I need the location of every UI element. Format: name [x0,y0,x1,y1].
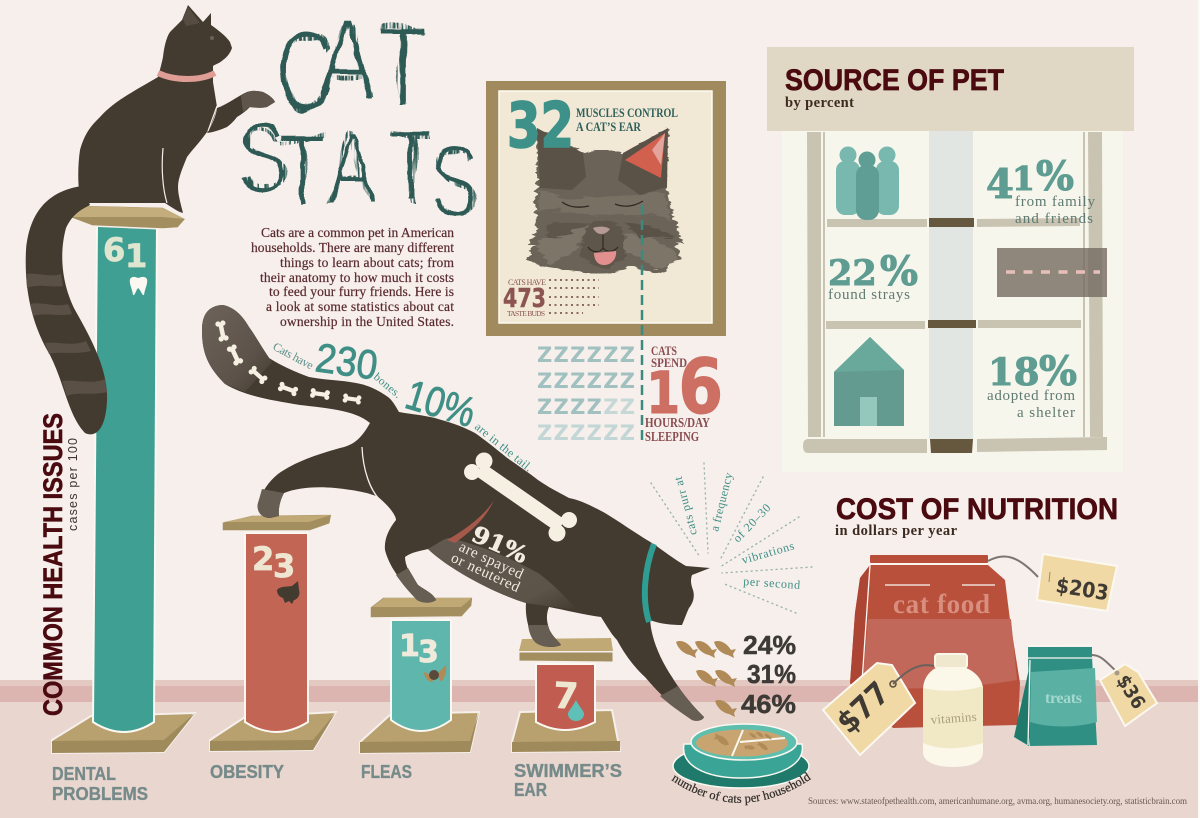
stat: 18 percent: adopted from [987,388,1075,404]
stat: 41 percent [986,153,1096,227]
value 23: 23 [252,540,295,585]
subheading: by percent [785,95,854,111]
axis labels [52,761,622,804]
sleep z rows [537,343,635,445]
sleep z rows: ZZZZZZ [537,395,635,419]
bag label: treats [1045,690,1082,707]
icon: people [836,146,899,220]
intro paragraph: a look at some statistics about cat [266,299,454,314]
purr frequency rays and text: vibrations [740,538,796,567]
bones statistic: are in the tail. [472,419,535,474]
stat: 22 percent: 22 [828,253,877,294]
cat food bag [850,555,1020,728]
raised paw [207,91,275,133]
heading: common health issues: COMMON HEALTH ISSUES [38,413,68,716]
title: Cat Stats: CAT [275,0,428,135]
sitting cat illustration [26,5,275,434]
bottle label: vitamins [930,709,977,727]
intro paragraph: to feed your furry friends. Here is [269,284,454,299]
fish row 24 percent: 24% [743,630,796,660]
sources credit: Sources: www.stateofpethealth.com, americanhumane.org, avma.org, humanesociety.org, statisticbrain.com [808,796,1187,806]
stat: 41 percent: 1 [1012,159,1035,198]
title: Cat Stats: STATS [238,101,479,238]
tail [26,186,107,434]
heading: common health issues [38,413,80,716]
icon: flea [424,665,446,682]
stat: 41 percent: from family [1015,194,1096,210]
sleep z rows: ZZZZZZ [537,369,635,393]
pillar: swimmer's ear 7 [512,638,620,752]
axis labels: SWIMMER’S [514,761,622,781]
sleep z rows: ZZZZZZ [537,421,635,445]
body and head [78,5,232,213]
sleep statistic: SLEEPING [645,429,699,444]
road sign [997,248,1107,297]
taste buds statistic: 473 [503,284,546,314]
framed portrait panel: A CAT’S EAR [576,119,641,134]
stat: 18 percent [987,348,1077,421]
stat: 22 percent [828,248,918,303]
framed portrait panel: MUSCLES CONTROL [576,105,678,120]
stat: 18 percent: % [1039,348,1077,395]
purr frequency rays and text [651,463,812,613]
spayed statistic: or neutered [448,550,523,596]
stat: 18 percent: a shelter [1017,405,1075,421]
intro paragraph: their anatomy to how much it costs [260,270,454,285]
heading: COST OF NUTRITION [836,493,1118,526]
value 13: 13 [399,629,439,670]
stat: 22 percent: found strays [828,287,910,303]
fish row 24 percent [676,630,796,660]
tail shading [202,305,272,392]
intro paragraph: ownership in the United States. [280,314,454,329]
eyes [562,201,643,207]
bowl caption: number of cats per household [671,772,812,806]
sleep dashed line [641,205,643,440]
spayed statistic [448,521,532,596]
value 7: 7 [552,676,579,718]
tail bones [215,320,362,405]
sleep statistic: CATS [651,343,677,358]
spayed statistic: are spayed [456,539,526,583]
axis labels: EAR [514,780,547,800]
paw shading [258,489,704,721]
intro paragraph: things to learn about cats; from [280,255,454,270]
fish row 31 percent: 31% [747,659,796,689]
vitamins bottle [923,654,983,767]
stat: 18 percent: 18 [988,350,1040,394]
purr frequency rays and text: per second [743,574,801,592]
stat: 41 percent: and friends [1015,211,1093,227]
axis labels: FLEAS [361,762,412,782]
icon: water drop [568,700,584,721]
stat: 41 percent: % [1036,153,1074,200]
sleep statistic: SPEND [651,355,687,370]
large bone [464,452,577,542]
sleep statistic: HOURS/DAY [645,415,710,430]
icon: house shelter [834,337,904,426]
icon: tooth [130,277,147,295]
pillar: obesity 23 [210,514,336,751]
axis labels: OBESITY [210,762,284,782]
intro paragraph: Cats are a common pet in American [261,225,454,240]
intro paragraph [251,225,454,329]
belly patch [428,538,577,610]
purr frequency rays and text: cats purr at [671,475,700,537]
ear inner shade [183,7,200,26]
stat: 41 percent: 4 [986,161,1014,208]
walking cat illustration [202,305,710,721]
tongue [594,251,616,265]
sleep z rows: ZZZZZZ [537,343,635,367]
ear inner [625,133,665,178]
nose and mouth [593,227,610,234]
taste buds statistic: TASTE BUDS [507,309,545,318]
fish row 46 percent: 46% [741,689,796,719]
muscles statistic: 32 [507,89,574,162]
pillar: dental problems 61 [52,205,195,753]
spayed statistic: 91% [468,521,532,569]
panel: source of pet [767,47,1134,472]
heading: SOURCE OF PET [785,64,1004,97]
value 61: 61 [103,231,147,275]
price tag 36 [1092,655,1157,726]
body [202,305,710,721]
treats bag [1014,645,1097,746]
axis labels: DENTAL [52,764,116,784]
price tag 36: $36 [1112,671,1149,713]
sleep statistic: 6 [678,343,723,431]
window background [782,131,1123,472]
title: Cat Stats [238,0,479,238]
price tag 203 [988,554,1117,611]
heading: common health issues: cases per 100 [66,438,80,531]
icon: cat face [527,128,683,273]
icon: food bowl [673,724,809,788]
bones statistic: Cats have [271,339,316,372]
taste buds statistic [503,278,546,318]
cats per household chart [671,630,812,806]
stat: 22 percent: % [880,248,918,295]
bones statistic: bones. [371,371,403,401]
bones statistic: 230 [313,334,381,389]
teal collar [645,544,654,622]
taste bud dots [549,280,599,313]
framed portrait panel [486,81,726,336]
purr frequency rays and text: a frequency [707,471,735,533]
purr frequency rays and text: of 20–30 [730,501,774,545]
fish row 31 percent [696,659,796,689]
spay scar [447,500,494,543]
icon: fat cat [277,581,299,604]
bones statistic [271,334,535,474]
axis labels: PROBLEMS [52,784,148,804]
intro paragraph: households. There are many different [251,240,454,255]
subheading: in dollars per year [835,523,958,539]
fish row 46 percent [715,689,796,719]
price tag 77 [823,663,934,755]
pillar: fleas 13 [360,597,479,753]
panel: cost of nutrition [823,493,1157,767]
sleep statistic [645,343,723,444]
price tag 203: $203 [1054,573,1110,605]
price tag 77: $77 [830,675,897,741]
sleep statistic: 1 [646,359,680,427]
bag label: cat food [893,589,990,619]
taste buds statistic: CATS HAVE [508,278,546,287]
pink collar [158,73,215,79]
header band [767,47,1134,131]
bones statistic: 10% [400,371,481,436]
